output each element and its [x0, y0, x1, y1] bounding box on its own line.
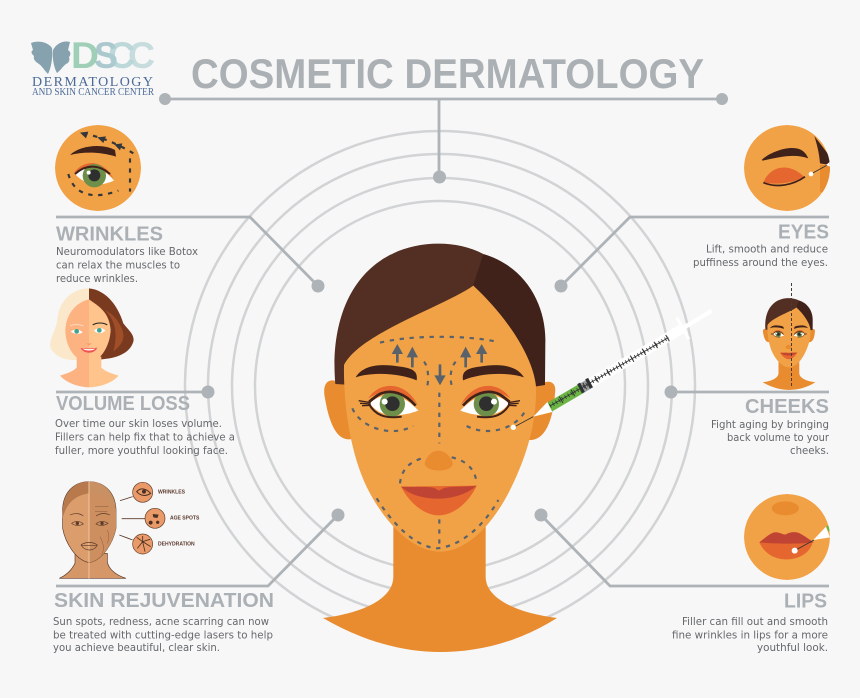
body text: Fight aging by bringing — [711, 419, 829, 431]
connector: eyes — [554, 217, 829, 292]
icon: aging face diagram: WRINKLES — [158, 489, 185, 495]
logo letters DSCC: S — [94, 35, 118, 76]
body text: Fillers can help fix that to achieve a — [55, 432, 235, 444]
body text: Neuromodulators like Botox — [56, 246, 198, 258]
panel: eyes — [693, 125, 832, 269]
heading: EYES — [778, 222, 829, 244]
concentric rings — [185, 131, 695, 641]
panel: lips — [672, 494, 831, 654]
connector: volume loss — [56, 386, 214, 398]
body text: fuller, more youthful looking face. — [55, 445, 228, 457]
panel: cheeks text — [711, 396, 830, 457]
body text: you achieve beautiful, clear skin. — [53, 642, 220, 654]
body text: back volume to your — [727, 432, 830, 444]
body text — [693, 244, 828, 269]
body text: youthful look. — [757, 642, 828, 654]
body text: can relax the muscles to — [56, 260, 180, 272]
body text: puffiness around the eyes. — [693, 257, 828, 269]
logo letters DSCC: C — [128, 35, 155, 76]
body text: be treated with cutting-edge lasers to help — [53, 630, 273, 642]
icon: lips with needle — [744, 494, 831, 580]
logo letters DSCC — [71, 35, 155, 76]
logo letters DSCC: D — [71, 35, 99, 76]
central face illustration — [323, 244, 557, 652]
body text: cheeks. — [790, 445, 829, 457]
connector: title bar — [159, 93, 728, 184]
heading: VOLUME LOSS — [56, 393, 190, 415]
icon: eye with wrinkle arrows — [55, 125, 141, 211]
body text: Over time our skin loses volume. — [55, 418, 222, 430]
dashed treatment lines — [352, 337, 527, 548]
connector: skin rejuvenation — [56, 508, 344, 586]
body text: fine wrinkles in lips for a more — [672, 630, 828, 642]
panel: wrinkles — [55, 125, 198, 285]
logo letters DSCC: C — [108, 35, 135, 76]
body text: reduce wrinkles. — [56, 273, 138, 285]
heading: LIPS — [784, 590, 827, 612]
icon: closed eye with needle — [744, 125, 832, 211]
icon: aging face diagram: DEHYDRATION — [158, 542, 195, 548]
panel: skin rejuvenation text — [53, 590, 274, 654]
panel: volume loss text — [55, 393, 235, 457]
body text: Filler can fill out and smooth — [682, 616, 828, 628]
body text — [55, 418, 235, 457]
arrows on forehead — [392, 344, 487, 385]
connector: cheeks — [664, 386, 829, 398]
logo wordmark: DERMATOLOGY — [32, 75, 153, 90]
logo subline: AND SKIN CANCER CENTER — [32, 87, 154, 98]
body text — [672, 616, 828, 654]
body text — [711, 419, 830, 457]
heading: WRINKLES — [56, 224, 163, 246]
body text — [56, 246, 198, 285]
heading: CHEEKS — [745, 396, 829, 418]
connector: wrinkles — [56, 217, 324, 292]
logo icon: butterfly faces — [31, 41, 70, 74]
icon: aging face diagram: AGE SPOTS — [170, 516, 200, 522]
logo — [31, 35, 155, 98]
syringe — [511, 311, 712, 430]
connector: lips — [534, 508, 829, 586]
icon: aging face diagram — [59, 482, 200, 578]
title: COSMETIC DERMATOLOGY — [191, 50, 704, 97]
heading: SKIN REJUVENATION — [54, 590, 274, 612]
icon: small face with center line — [763, 283, 815, 390]
body text: Sun spots, redness, acne scarring can now — [53, 616, 269, 628]
body text: Lift, smooth and reduce — [706, 244, 828, 256]
body text — [53, 616, 273, 654]
icon: half-and-half woman portrait — [50, 288, 134, 387]
